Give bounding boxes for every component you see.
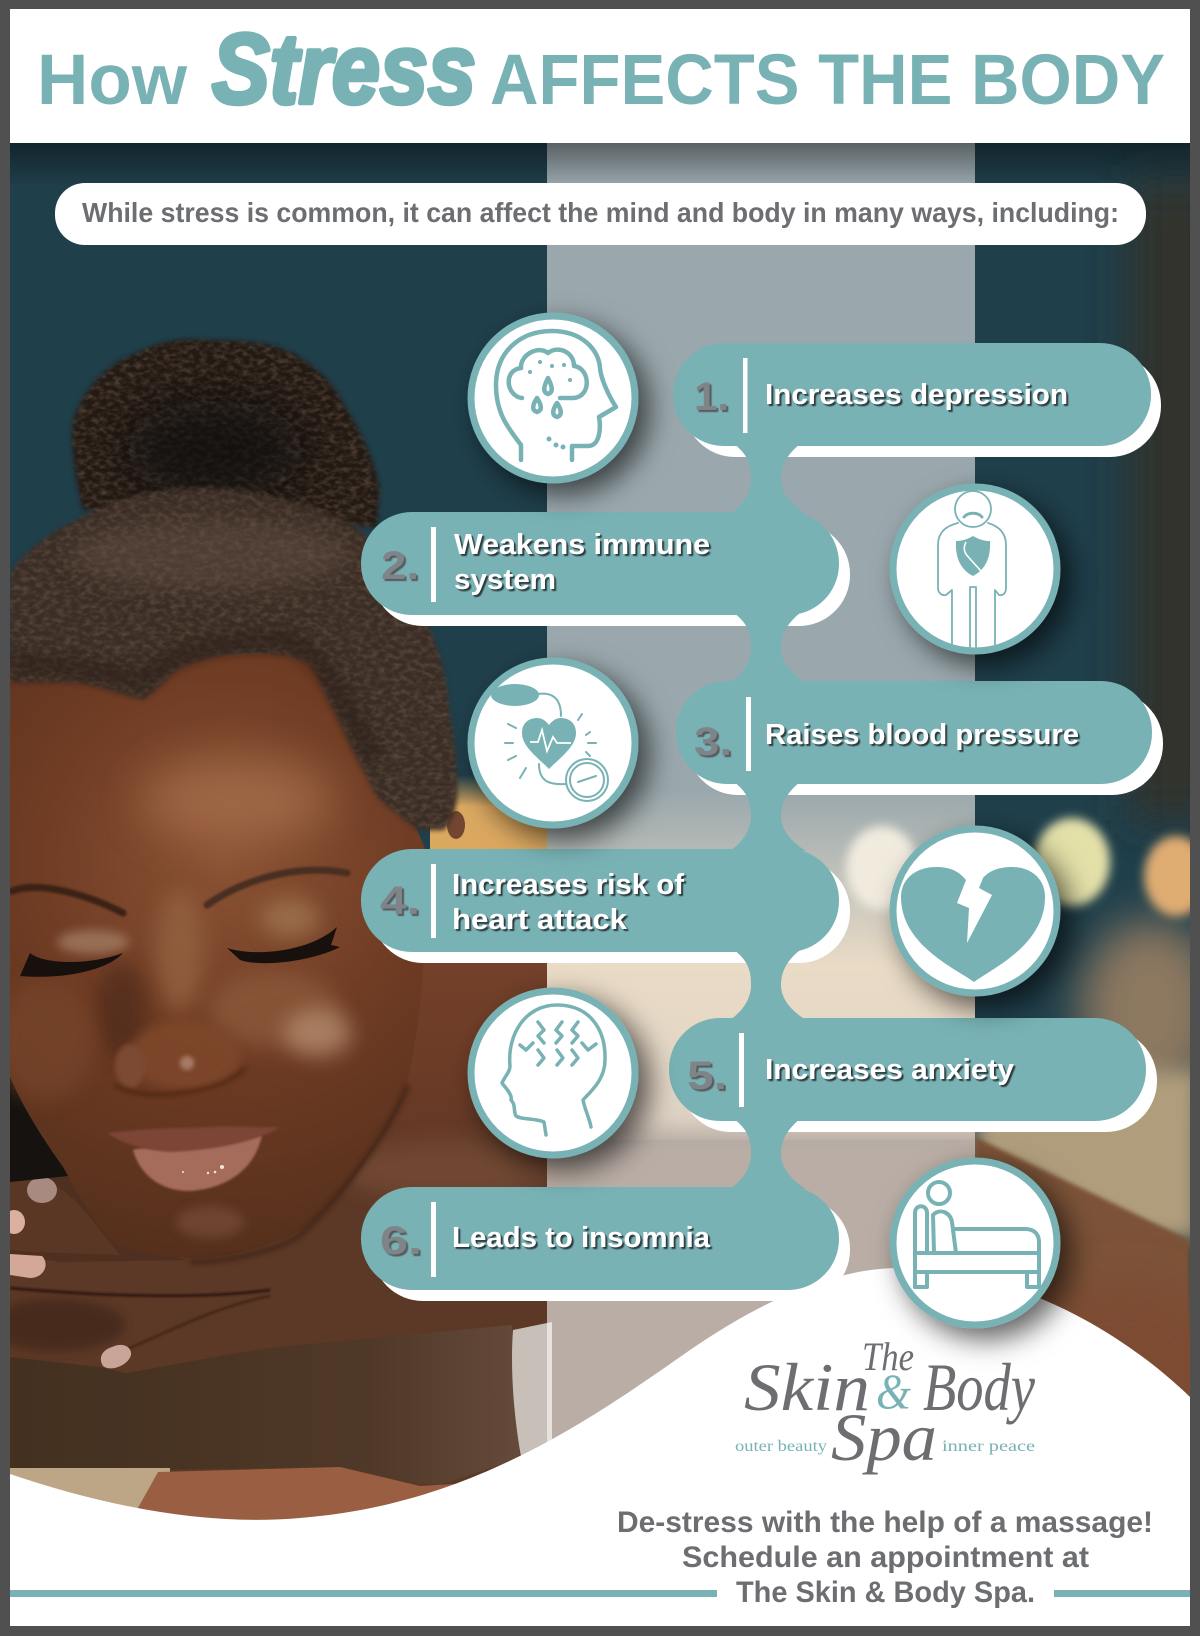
- shoulder right: [975, 1136, 1190, 1336]
- hair bun: [72, 339, 380, 527]
- towel: [512, 1322, 552, 1462]
- icon: person with cracked shield: [893, 487, 1057, 651]
- eyebrows: [12, 870, 347, 913]
- step 4: increases risk of heart attack: [361, 849, 839, 952]
- label 2: system: [454, 564, 556, 596]
- call to action: [617, 1506, 1153, 1609]
- number 1: 1.: [694, 375, 729, 419]
- header shadow: [10, 143, 1190, 187]
- step 6: leads to insomnia: [361, 1187, 839, 1290]
- label 5: Increases anxiety: [765, 1054, 1014, 1086]
- facial shading: [0, 758, 352, 1238]
- icon: person sitting on a bed: [893, 1161, 1057, 1325]
- warm background glow: [430, 775, 1200, 1240]
- title: How: How: [37, 41, 188, 120]
- white pill shadows: [372, 354, 1163, 1301]
- number 6: 6.: [380, 1219, 422, 1263]
- logo: The Skin and Body Spa: Skin: [744, 1349, 870, 1425]
- logo: The Skin and Body Spa: Spa: [831, 1399, 937, 1475]
- step 5: increases anxiety: [669, 1018, 1146, 1121]
- label 1: Increases depression: [765, 379, 1068, 411]
- label 6: Leads to insomnia: [452, 1222, 711, 1254]
- icon: heart with blood pressure cuff: [471, 661, 635, 825]
- light vertical stripe: [547, 143, 975, 1543]
- call to action: Schedule an appointment at: [682, 1541, 1089, 1574]
- ear: [447, 811, 465, 839]
- number 4: 4.: [380, 879, 420, 923]
- logo: The Skin and Body Spa: inner peace: [942, 1438, 1035, 1455]
- logo: The Skin and Body Spa: Body: [923, 1349, 1036, 1425]
- bed linen: [10, 1467, 455, 1520]
- jaw shadow: [190, 1085, 408, 1262]
- label 3: Raises blood pressure: [765, 719, 1079, 751]
- label 2: [454, 529, 710, 596]
- title: affects the body: AFFECTS THE BODY: [490, 41, 1165, 120]
- label 4: Increases risk of: [452, 869, 684, 901]
- logo: The Skin and Body Spa: &: [876, 1363, 911, 1419]
- number 2: 2.: [381, 544, 419, 588]
- title: Stress: Stress: [212, 13, 476, 124]
- shield: [956, 536, 990, 576]
- step 3: raises blood pressure: [676, 681, 1152, 784]
- face: [10, 650, 430, 1258]
- number 5: 5.: [687, 1054, 727, 1098]
- label 4: heart attack: [452, 904, 628, 936]
- logo: The Skin and Body Spa: The: [862, 1334, 914, 1379]
- hair: [10, 488, 457, 830]
- arm and hand base: [10, 1150, 547, 1495]
- fingers and hand: [0, 1165, 270, 1352]
- sleeve over lower arm: [10, 1325, 520, 1485]
- label 4: [452, 869, 684, 936]
- connector between the steps: [730, 444, 806, 1189]
- intro pill: While stress is common, it can affect the mind and body in many ways, including:: [82, 197, 1119, 228]
- neck and back: [372, 963, 547, 1150]
- logo: The Skin and Body Spa: outer beauty: [735, 1438, 827, 1455]
- title banner: [10, 9, 1190, 143]
- white wave panel: [10, 1268, 1190, 1626]
- step 1: increases depression: [673, 343, 1151, 446]
- number 3: 3.: [694, 720, 732, 764]
- lips: [107, 1126, 280, 1191]
- icon: head with stress zigzags: [471, 991, 635, 1155]
- intro pill: [55, 183, 1146, 245]
- shoulder behind stripe: [547, 1122, 975, 1440]
- bokeh lights: [846, 818, 1200, 916]
- nose: [115, 1021, 245, 1095]
- icon: head with rain cloud: [471, 316, 635, 480]
- label 2: Weakens immune: [454, 529, 710, 561]
- step 2: weakens immune system: [361, 512, 839, 615]
- footer rule: [10, 1590, 1190, 1597]
- call to action: The Skin & Body Spa.: [736, 1576, 1035, 1609]
- logo: The Skin and Body Spa: [735, 1334, 1036, 1475]
- call to action: De-stress with the help of a massage!: [617, 1506, 1153, 1539]
- closed eyes with lashes: [20, 927, 340, 977]
- fingernails: [3, 1177, 131, 1368]
- icon: broken heart: [893, 829, 1057, 993]
- dark gap beside the chin: [10, 1077, 68, 1182]
